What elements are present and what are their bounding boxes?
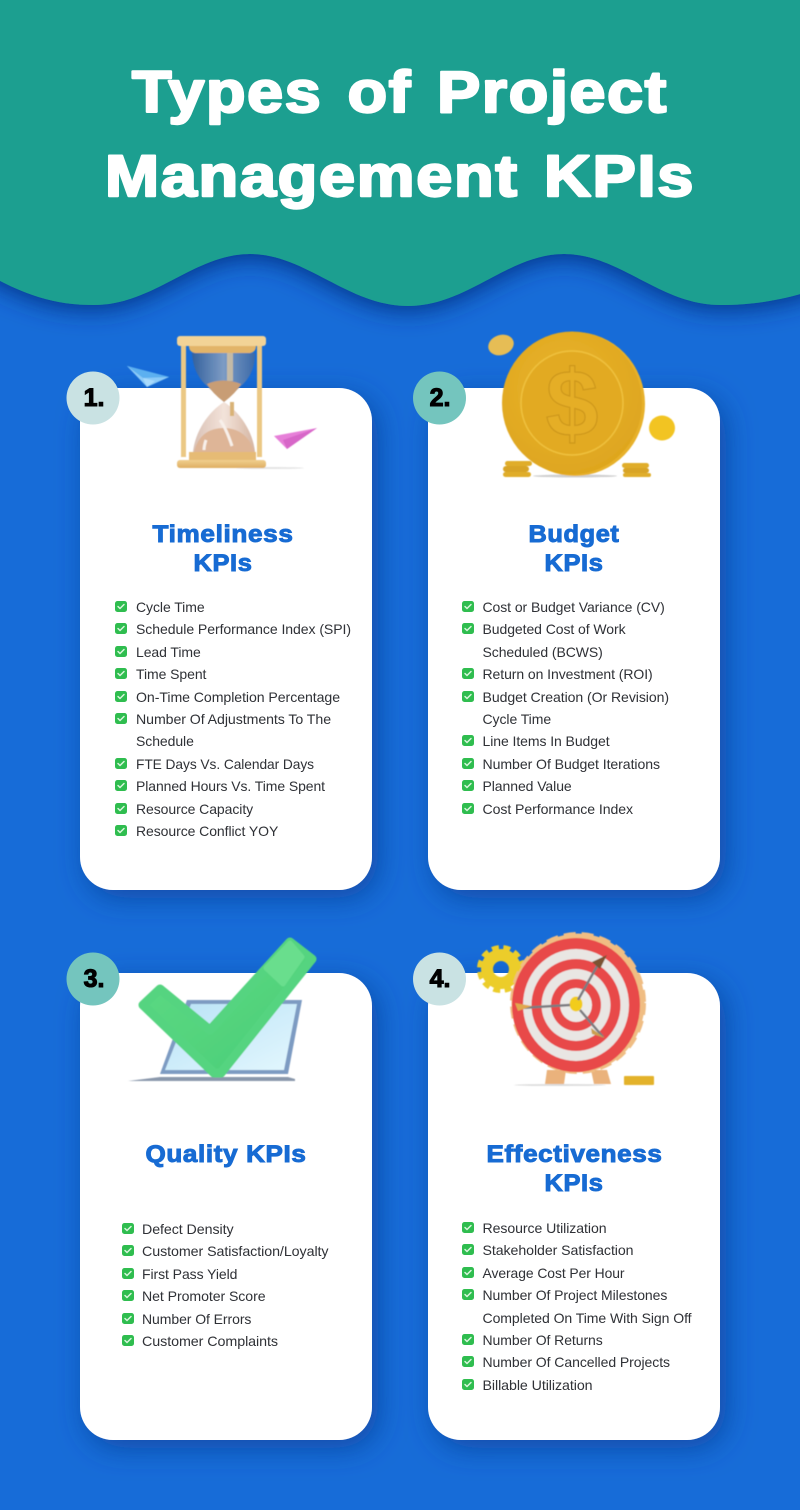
checklist: timeliness: Schedule Performance Index (SPI) <box>136 621 351 637</box>
badge: number 3: 3. <box>84 965 104 993</box>
checklist: timeliness: Time Spent <box>136 666 207 682</box>
heading: effectiveness: KPIs <box>544 1170 604 1197</box>
heading: timeliness: Timeliness <box>152 521 294 548</box>
checklist: effectiveness: Average Cost Per Hour <box>482 1265 625 1281</box>
icon: paper plane blue <box>127 366 169 387</box>
badge: number 4: 4. <box>430 965 450 993</box>
checklist: timeliness: Resource Conflict YOY <box>136 823 279 839</box>
checklist: budget <box>462 599 669 817</box>
checklist: timeliness <box>115 599 351 839</box>
checklist: budget: Cost or Budget Variance (CV) <box>482 599 665 615</box>
icon: gold coin: $ <box>546 351 598 457</box>
checklist: effectiveness: Completed On Time With Sign Off <box>482 1310 692 1326</box>
checklist: timeliness: Lead Time <box>136 644 201 660</box>
heading: quality: Quality KPIs <box>146 1141 306 1168</box>
title <box>105 60 695 209</box>
icon: gear <box>480 948 522 990</box>
checklist: effectiveness: Number Of Returns <box>482 1332 603 1348</box>
heading: budget <box>528 521 620 577</box>
checklist: quality <box>122 1221 329 1349</box>
icon: gold coin <box>486 331 675 478</box>
icon: hourglass <box>177 336 304 469</box>
checklist: effectiveness <box>462 1220 692 1393</box>
heading: effectiveness: Effectiveness <box>486 1141 662 1168</box>
checklist: quality: First Pass Yield <box>142 1266 237 1282</box>
checklist: effectiveness: Resource Utilization <box>482 1220 606 1236</box>
checklist: budget: Cycle Time <box>482 711 551 727</box>
icon: laptop with check mark <box>128 942 312 1081</box>
checklist: budget: Line Items In Budget <box>482 733 610 749</box>
checklist: effectiveness: Billable Utilization <box>482 1377 592 1393</box>
checklist: budget: Number Of Budget Iterations <box>482 756 660 772</box>
checklist: effectiveness: Stakeholder Satisfaction <box>482 1242 634 1258</box>
panel: quality KPIs <box>80 973 372 1440</box>
checklist: quality: Defect Density <box>142 1221 234 1237</box>
checklist: timeliness: Planned Hours Vs. Time Spent <box>136 778 325 794</box>
badge: number 1 <box>66 372 120 424</box>
checklist: timeliness: Number Of Adjustments To The <box>136 711 331 727</box>
heading: effectiveness <box>486 1141 662 1197</box>
title: Management KPIs <box>105 144 695 209</box>
badge: number 2: 2. <box>430 384 450 412</box>
checklist: budget: Cost Performance Index <box>482 801 633 817</box>
panel: timeliness KPIs <box>80 388 372 890</box>
icon: paper plane pink <box>274 428 317 449</box>
checklist: budget: Budgeted Cost of Work <box>482 621 627 637</box>
checklist: timeliness: On-Time Completion Percentage <box>136 689 340 705</box>
checklist: timeliness: Resource Capacity <box>136 801 253 817</box>
checklist: timeliness: Cycle Time <box>136 599 205 615</box>
panel: effectiveness KPIs <box>428 973 720 1440</box>
checklist: effectiveness: Number Of Cancelled Projects <box>482 1354 670 1370</box>
header wave banner <box>0 0 800 306</box>
checklist: effectiveness: Number Of Project Milestones <box>482 1287 667 1303</box>
checklist: quality: Net Promoter Score <box>142 1288 266 1304</box>
checklist: budget: Budget Creation (Or Revision) <box>482 689 669 705</box>
heading: budget: Budget <box>528 521 620 548</box>
checklist: timeliness: FTE Days Vs. Calendar Days <box>136 756 314 772</box>
badge: number 3 <box>66 952 120 1006</box>
icon: target with arrows and gear <box>480 934 654 1086</box>
title: Types of Project <box>132 60 668 125</box>
checklist: quality: Customer Complaints <box>142 1333 278 1349</box>
checklist: budget: Scheduled (BCWS) <box>482 644 603 660</box>
checklist: budget: Planned Value <box>482 778 572 794</box>
badge: number 4 <box>413 952 466 1006</box>
panel: budget KPIs <box>428 388 720 890</box>
checklist: quality: Customer Satisfaction/Loyalty <box>142 1243 329 1259</box>
badge: number 2 <box>413 372 466 424</box>
checklist: timeliness: Schedule <box>136 733 194 749</box>
badge: number 1: 1. <box>84 384 104 412</box>
heading: timeliness <box>152 521 294 577</box>
heading: budget: KPIs <box>544 550 604 577</box>
checklist: budget: Return on Investment (ROI) <box>482 666 653 682</box>
checklist: quality: Number Of Errors <box>142 1311 251 1327</box>
heading: timeliness: KPIs <box>194 550 252 577</box>
